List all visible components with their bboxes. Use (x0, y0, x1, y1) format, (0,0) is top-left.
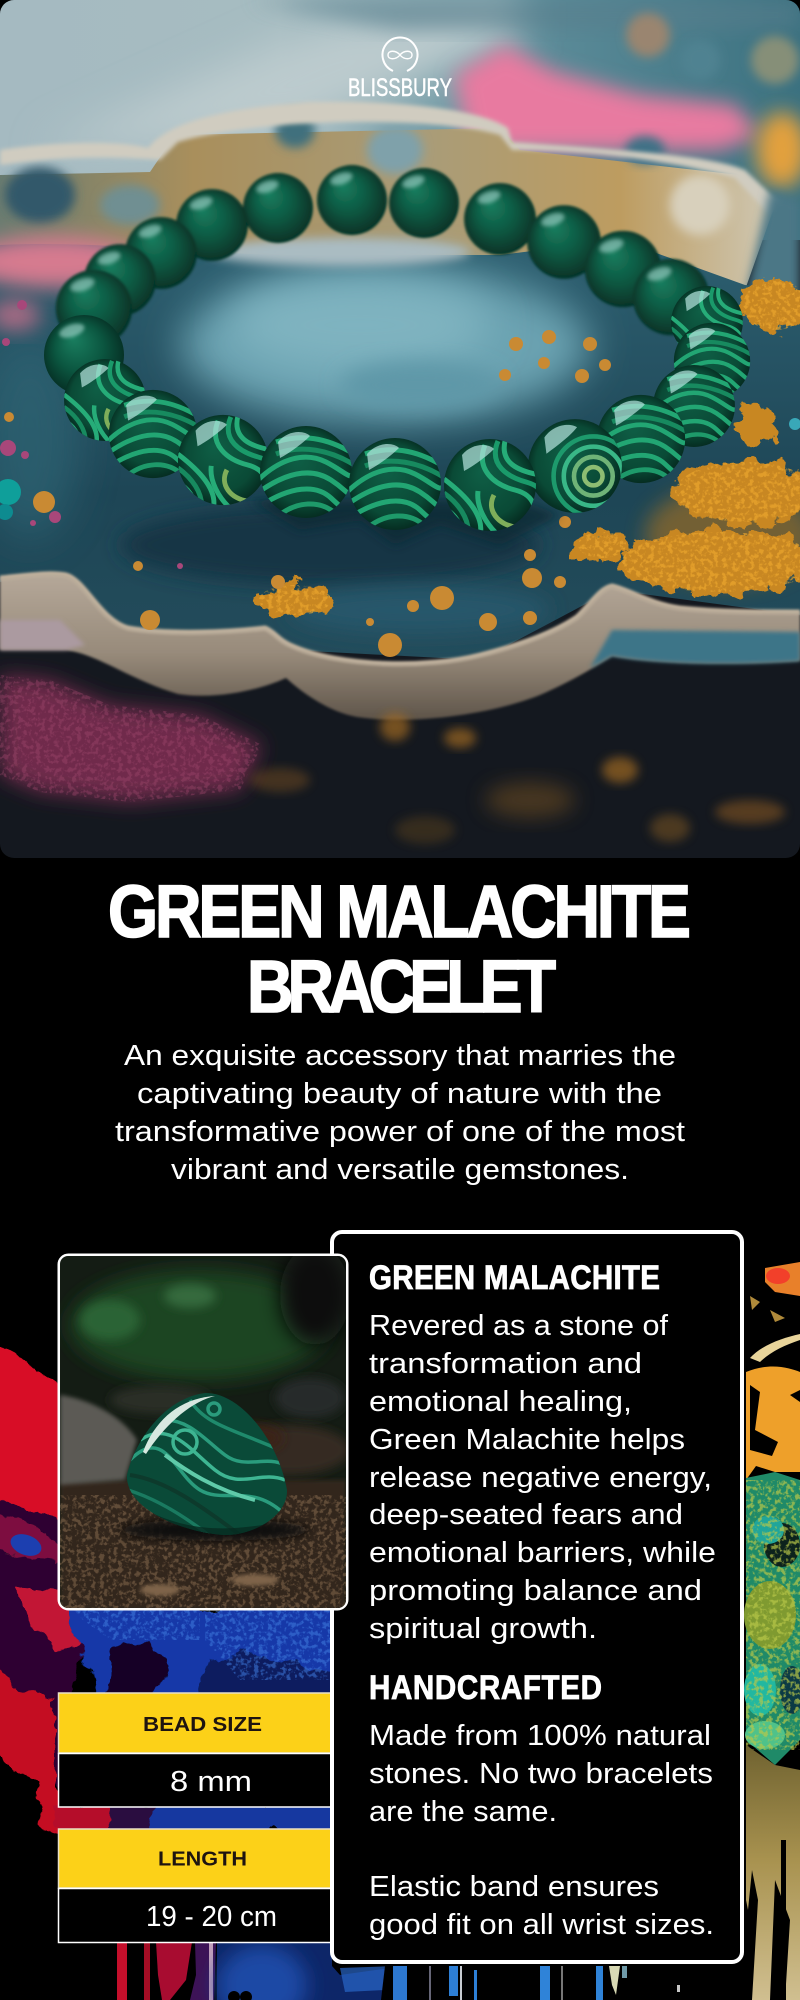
bracelet beads (44, 165, 754, 535)
spec: bead size: 8 mm (170, 1766, 252, 1798)
tray floor (0, 236, 800, 660)
text: handcrafted details (369, 1720, 714, 1941)
intro paragraph: captivating beauty of nature with the (137, 1078, 662, 1110)
text: malachite description: release negative energy, (369, 1462, 712, 1494)
intro paragraph: An exquisite accessory that marries the (124, 1040, 676, 1072)
text: handcrafted details: Made from 100% natural (369, 1720, 711, 1752)
spec: length: 19 - 20 cm (146, 1901, 277, 1933)
intro paragraph (115, 1040, 685, 1186)
text: malachite description: Green Malachite helps (369, 1424, 685, 1456)
text: malachite description: Revered as a stone of (369, 1310, 669, 1342)
text: malachite description: emotional healing, (369, 1386, 632, 1418)
tray front rim (0, 574, 800, 720)
logo: BLISSBURY (348, 74, 452, 102)
spec: bead size: BEAD SIZE (143, 1713, 262, 1736)
text: handcrafted details: are the same. (369, 1796, 557, 1828)
title: GREEN MALACHITE (108, 870, 691, 953)
text: handcrafted details: stones. No two bracelets (369, 1758, 713, 1790)
logo (348, 37, 452, 102)
spec: bead size (58, 1693, 334, 1807)
text: malachite description: promoting balance and (369, 1575, 702, 1607)
bottom drips (117, 1942, 680, 2000)
heading: handcrafted: HANDCRAFTED (369, 1668, 602, 1706)
photo: malachite stone (60, 1245, 350, 1610)
heading: green malachite: GREEN MALACHITE (369, 1258, 660, 1296)
background paint splash: left and bottom (0, 1345, 680, 2000)
text: malachite description: deep-seated fears and (369, 1499, 683, 1531)
text: handcrafted details: good fit on all wrist sizes. (369, 1909, 714, 1941)
text: malachite description: emotional barriers, while (369, 1537, 716, 1569)
text: malachite description (369, 1310, 716, 1645)
title (108, 870, 691, 1028)
spec: length (58, 1829, 334, 1942)
logo icon: infinity in circle (382, 37, 418, 71)
spec: length: LENGTH (158, 1848, 247, 1870)
tray back wall (0, 102, 800, 300)
orange and pink dust on tray (0, 279, 800, 657)
intro paragraph: transformative power of one of the most (115, 1116, 685, 1148)
coloured powder below tray (0, 675, 785, 844)
background paint splash: right (744, 1262, 800, 2000)
text: handcrafted details: Elastic band ensures (369, 1871, 659, 1903)
info card (332, 1232, 742, 1962)
text: malachite description: spiritual growth. (369, 1613, 597, 1645)
hero photo: malachite bracelet on tray (0, 0, 800, 858)
title: BRACELET (247, 945, 556, 1028)
text: malachite description: transformation and (369, 1348, 642, 1380)
intro paragraph: vibrant and versatile gemstones. (171, 1154, 629, 1186)
bead shadows (250, 500, 560, 545)
